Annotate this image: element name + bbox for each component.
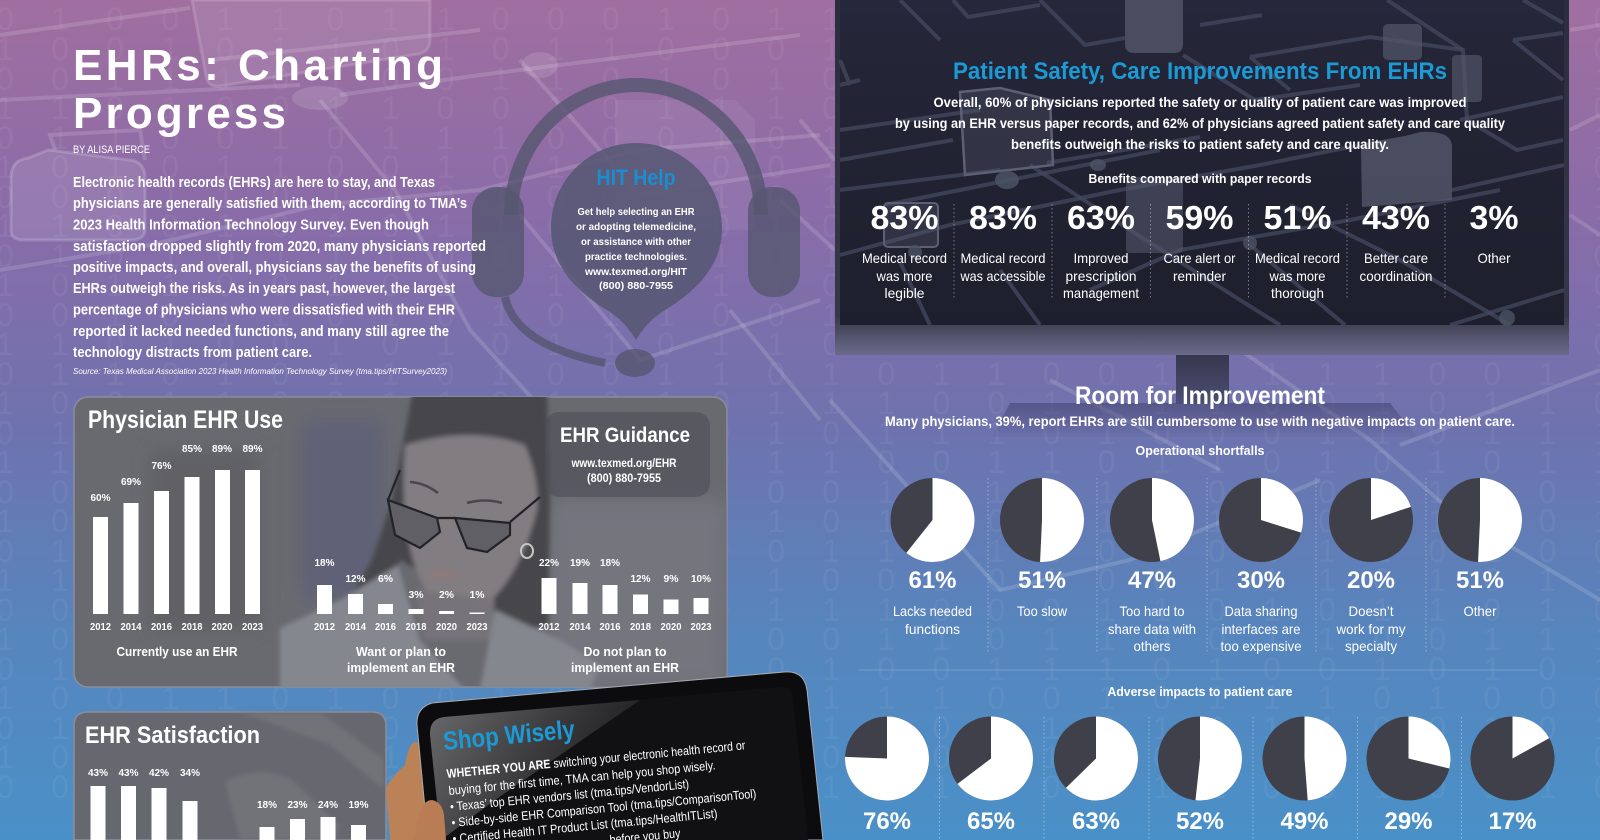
pie: too hard to share data: share data with: [1108, 621, 1196, 637]
bar chart: do not plan to implement: [538, 558, 712, 675]
bar chart: currently use an EHR: 2023: [242, 622, 263, 633]
bar chart: satisfied: 43%: [88, 768, 108, 779]
stat: legible: [862, 199, 947, 301]
HIT Help text: www.texmed.org/HIT: [584, 266, 688, 278]
bar chart: do not plan to implement: 22%: [539, 558, 559, 569]
bar chart: currently use an EHR: 85%: [182, 444, 202, 455]
intro paragraph: percentage of physicians who were dissatisfied with their EHR: [73, 302, 455, 318]
bar chart: satisfied: [88, 768, 200, 840]
stat: prescription: 63%: [1067, 199, 1135, 236]
intro paragraph: 2023 Health Information Technology Survey. Even though: [73, 218, 429, 234]
monitor screen: [840, 0, 1564, 325]
bar chart: currently use an EHR: 89%: [242, 444, 263, 455]
icon: thumb: [413, 800, 446, 840]
HIT Help heading: HIT Help: [596, 165, 676, 190]
bar chart: satisfied: 34%: [180, 768, 200, 779]
bar chart: want or plan to implement: 2020: [436, 622, 457, 633]
intro paragraph: physicians are generally satisfied with them, according to TMA’s: [73, 196, 467, 212]
subheading: operational shortfalls: Operational shortfalls: [1136, 443, 1264, 458]
pie: data sharing expensive: interfaces are: [1222, 621, 1301, 637]
icon: hand holding tablet: [386, 742, 425, 840]
heading: room for improvement: Room for Improvement: [1075, 382, 1326, 410]
pie: too slow: [1000, 478, 1084, 619]
bar chart: dissatisfied: 24%: [318, 800, 338, 811]
bar chart: do not plan to implement: 10%: [691, 574, 711, 585]
pie: other shortfalls: Other: [1464, 603, 1497, 619]
bar chart: do not plan to implement: 18%: [600, 558, 620, 569]
intro paragraph: technology distracts from patient care.: [73, 345, 312, 361]
stat: coordination: [1360, 199, 1432, 284]
shop wisely text: • Side-by-side EHR Comparison Tool (tma.tips/ComparisonTool): [451, 787, 757, 830]
panel: EHR satisfaction: [74, 712, 386, 840]
pie: adverse 63%: [1054, 716, 1138, 835]
bar chart: currently use an EHR: [90, 444, 263, 659]
bar chart: want or plan to implement: 2023: [466, 622, 488, 633]
stat: other: 3%: [1470, 199, 1518, 236]
box: EHR guidance: [545, 412, 710, 497]
icon: headset: [472, 85, 800, 377]
pie: adverse 29%: 29%: [1384, 808, 1432, 835]
monitor: [835, 0, 1569, 437]
bar chart: currently use an EHR: Currently use an EHR: [116, 644, 238, 659]
heading: physician EHR use: Physician EHR Use: [88, 406, 283, 434]
bar chart: want or plan to implement: implement an EHR: [347, 660, 456, 675]
intro paragraph: satisfaction dropped slightly from 2020, many physicians reported: [73, 239, 486, 255]
pie: adverse 76%: 76%: [863, 808, 911, 835]
bar chart: want or plan to implement: 2018: [406, 622, 427, 633]
bar chart: currently use an EHR: 89%: [212, 444, 232, 455]
bar chart: want or plan to implement: 2014: [345, 622, 366, 633]
source note: Source: Texas Medical Association 2023 Health Information Technology Survey (tma.tips/HITSurvey2023): [73, 366, 447, 376]
HIT Help text: [576, 206, 696, 292]
patient safety paragraph: by using an EHR versus paper records, and 62% of physicians agreed patient safety and care quality: [895, 115, 1505, 131]
bar chart: do not plan to implement: 2012: [538, 622, 560, 633]
bar chart: want or plan to implement: 18%: [314, 558, 335, 569]
bar chart: want or plan to implement: 2016: [375, 622, 396, 633]
pie: doesn't work for specialty: 20%: [1347, 567, 1395, 594]
bar chart: want or plan to implement: [314, 558, 488, 675]
screen reflection: [430, 700, 640, 840]
stat: thorough: thorough: [1271, 285, 1324, 301]
intro paragraph: Electronic health records (EHRs) are here to stay, and Texas: [73, 175, 435, 191]
bar chart: want or plan to implement: 3%: [408, 590, 424, 601]
bar chart: currently use an EHR: 2014: [120, 622, 142, 633]
bar chart: dissatisfied: 23%: [288, 800, 308, 811]
intro paragraph: EHRs outweigh the risks. As in years past, however, the largest: [73, 281, 455, 297]
pie: adverse 65%: [949, 716, 1033, 835]
heading: EHR satisfaction: EHR Satisfaction: [85, 722, 260, 749]
pie: data sharing expensive: Data sharing: [1224, 603, 1298, 619]
pie: too slow: 51%: [1018, 567, 1066, 594]
monitor bezel: [835, 0, 1569, 355]
HIT Help text: or adopting telemedicine,: [576, 221, 696, 233]
intro paragraph: positive impacts, and overall, physicians say the benefits of using: [73, 260, 476, 276]
bar chart: do not plan to implement: Do not plan to: [584, 644, 667, 659]
HIT Help text: (800) 880-7955: [599, 280, 673, 292]
stat: coordination: 43%: [1362, 199, 1430, 236]
stat: alert: reminder: [1173, 268, 1226, 284]
stat: prescription: management: [1063, 285, 1139, 301]
pie: adverse 49%: [1262, 716, 1346, 835]
title: EHRs: Charting: [73, 41, 443, 90]
bar chart: do not plan to implement: 2018: [630, 622, 651, 633]
box: EHR guidance: (800) 880-7955: [587, 473, 662, 485]
pie: too hard to share data: 47%: [1128, 567, 1176, 594]
bar chart: satisfied: 43%: [118, 768, 139, 779]
pie: lacks needed functions: 61%: [908, 567, 956, 594]
stat: prescription: Improved: [1074, 250, 1128, 266]
pie: adverse 63%: 63%: [1072, 808, 1120, 835]
pie: other shortfalls: 51%: [1456, 567, 1504, 594]
byline: BY ALISA PIERCE: [73, 144, 150, 156]
bar chart: do not plan to implement: 9%: [664, 574, 679, 585]
photo: physician: [150, 390, 727, 690]
bar chart: want or plan to implement: Want or plan to: [356, 644, 446, 659]
bar chart: want or plan to implement: 2012: [314, 622, 335, 633]
pie: adverse 17%: 17%: [1488, 808, 1536, 835]
bar chart: currently use an EHR: 60%: [90, 493, 111, 504]
stat: coordination: coordination: [1360, 268, 1432, 284]
stat: thorough: Medical record: [1255, 250, 1340, 266]
stat: coordination: Better care: [1364, 250, 1428, 266]
stat: accessible: 83%: [969, 199, 1037, 236]
pie: doesn't work for specialty: work for my: [1336, 621, 1406, 637]
stat: legible: 83%: [870, 199, 938, 236]
pie: data sharing expensive: 30%: [1237, 567, 1285, 594]
stat: accessible: was accessible: [960, 268, 1046, 284]
heading: shop wisely: Shop Wisely: [442, 714, 576, 756]
bar chart: want or plan to implement: 2%: [439, 590, 454, 601]
stat: accessible: [960, 199, 1046, 284]
pie: too slow: Too slow: [1017, 603, 1068, 619]
stat: thorough: was more: [1269, 268, 1326, 284]
bar chart: currently use an EHR: 69%: [121, 477, 141, 488]
shop wisely text: WHETHER YOU ARE switching your electronic health record or: [446, 738, 746, 781]
bar chart: currently use an EHR: 2020: [212, 622, 233, 633]
bar chart: do not plan to implement: implement an EHR: [571, 660, 680, 675]
pie: lacks needed functions: [890, 478, 974, 637]
intro paragraph: [73, 175, 486, 361]
pie: other shortfalls: [1438, 478, 1522, 619]
pie: too hard to share data: Too hard to: [1120, 603, 1185, 619]
HIT Help text: practice technologies.: [585, 251, 687, 263]
bar chart: currently use an EHR: 76%: [152, 461, 172, 472]
patient safety paragraph: Overall, 60% of physicians reported the safety or quality of patient care was improved: [934, 94, 1466, 110]
bar chart: do not plan to implement: 2014: [570, 622, 591, 633]
speech bubble: [551, 143, 722, 340]
box: EHR guidance: www.texmed.org/EHR: [571, 458, 677, 470]
panel background: [74, 397, 727, 687]
pie: adverse 49%: 49%: [1280, 808, 1328, 835]
stat: other: Other: [1478, 250, 1511, 266]
stat: legible: Medical record: [862, 250, 947, 266]
pie: adverse 65%: 65%: [967, 808, 1015, 835]
pie: lacks needed functions: functions: [905, 621, 960, 637]
bar chart: currently use an EHR: 2016: [151, 622, 172, 633]
bar chart: do not plan to implement: 19%: [570, 558, 590, 569]
HIT Help headset callout: [472, 85, 800, 377]
pie: adverse 76%: [845, 716, 929, 835]
pie: data sharing expensive: too expensive: [1220, 638, 1302, 654]
stat: alert: 59%: [1166, 199, 1234, 236]
bar chart: dissatisfied: 19%: [348, 800, 369, 811]
bar chart: satisfied: 42%: [149, 768, 169, 779]
HIT Help text: or assistance with other: [581, 236, 691, 248]
pie: doesn't work for specialty: [1329, 478, 1413, 654]
bar chart: dissatisfied: 18%: [257, 800, 277, 811]
stat: alert: Care alert or: [1164, 250, 1236, 266]
panel background: [74, 712, 386, 840]
monitor stand: [992, 350, 1417, 437]
bar chart: do not plan to implement: 2020: [660, 622, 682, 633]
title: [73, 41, 443, 138]
panel: physician EHR use: [74, 390, 727, 690]
bar chart: currently use an EHR: 2018: [182, 622, 203, 633]
stat: other: [1470, 199, 1518, 266]
tablet: shop wisely: [386, 672, 823, 840]
shop wisely text: buying for the first time, TMA can help you shop wisely.: [448, 758, 716, 798]
HIT Help text: Get help selecting an EHR: [578, 206, 695, 218]
stat: thorough: 51%: [1264, 199, 1332, 236]
bar chart: dissatisfied: [257, 800, 369, 840]
stat: thorough: [1255, 199, 1340, 301]
bar chart: want or plan to implement: 1%: [470, 590, 485, 601]
photo: hand and paper: [225, 712, 384, 840]
bar chart: currently use an EHR: 2012: [90, 622, 111, 633]
intro paragraph: reported it lacked needed functions, and many still agree the: [73, 324, 449, 340]
patient safety paragraph: [895, 94, 1505, 152]
pie: adverse 29%: [1366, 716, 1450, 835]
pie: adverse 52%: 52%: [1176, 808, 1224, 835]
room for improvement summary: Many physicians, 39%, report EHRs are still cumbersome to use with negative impacts on patient care.: [885, 413, 1515, 429]
stat: prescription: prescription: [1066, 268, 1136, 284]
shop wisely text: [446, 738, 757, 840]
stat: alert: [1164, 199, 1236, 284]
subheading: adverse impacts: Adverse impacts to patient care: [1108, 684, 1292, 699]
stat: accessible: Medical record: [960, 250, 1046, 266]
stat: legible: legible: [884, 285, 925, 301]
shop wisely text: • Texas’ top EHR vendors list (tma.tips/VendorList): [449, 777, 690, 814]
bar chart: do not plan to implement: 12%: [630, 574, 651, 585]
bar chart: want or plan to implement: 12%: [346, 574, 366, 585]
box: EHR guidance: EHR Guidance: [560, 424, 690, 447]
bar chart: want or plan to implement: 6%: [378, 574, 393, 585]
pie: doesn't work for specialty: specialty: [1345, 638, 1397, 654]
pie: doesn't work for specialty: Doesn’t: [1348, 603, 1394, 619]
stat: prescription: [1063, 199, 1139, 301]
pie: adverse 17%: [1470, 716, 1554, 835]
pie: too hard to share data: others: [1134, 638, 1170, 654]
pie: too hard to share data: [1108, 478, 1196, 654]
heading: patient safety: Patient Safety, Care Improvements From EHRs: [953, 58, 1447, 85]
pie: lacks needed functions: Lacks needed: [893, 603, 972, 619]
subheading: benefits: Benefits compared with paper records: [1088, 171, 1312, 186]
stat: legible: was more: [876, 268, 933, 284]
tablet body: [417, 672, 823, 840]
pie: data sharing expensive: [1219, 478, 1303, 654]
patient safety paragraph: benefits outweigh the risks to patient safety and care quality.: [1011, 136, 1389, 152]
title: Progress: [73, 89, 286, 138]
pie: adverse 52%: [1158, 716, 1242, 835]
bar chart: do not plan to implement: 2023: [690, 622, 712, 633]
bar chart: do not plan to implement: 2016: [600, 622, 621, 633]
tablet screen: [430, 687, 808, 840]
